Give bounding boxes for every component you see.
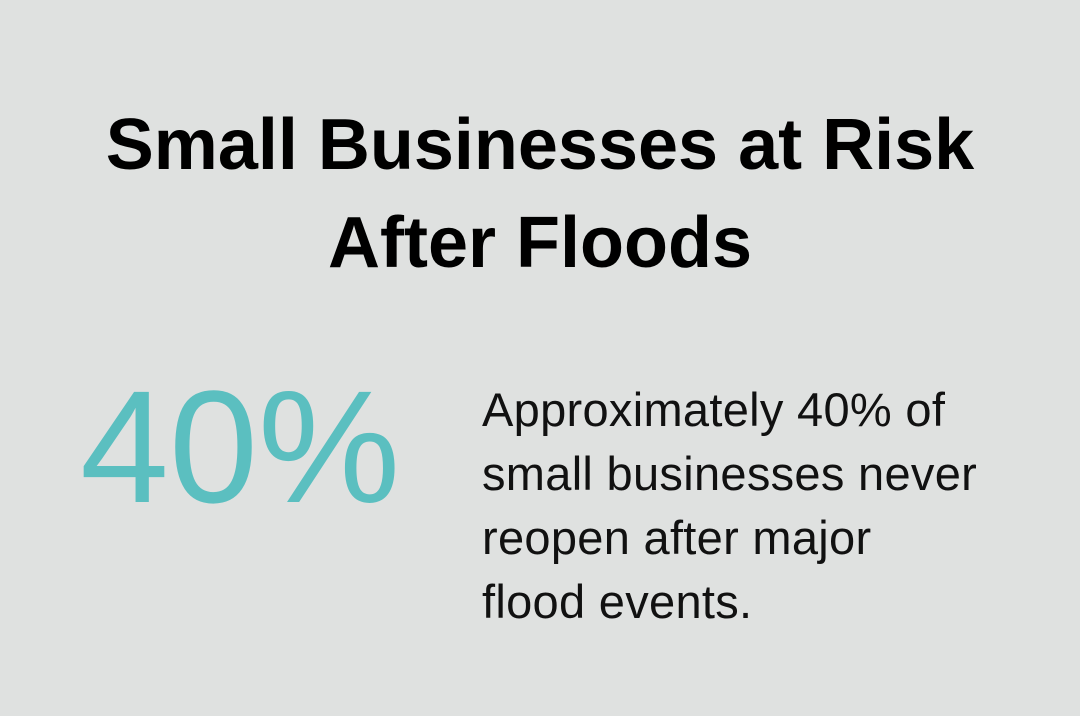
title: [106, 105, 974, 283]
description text: reopen after major: [482, 511, 871, 564]
title: Small Businesses at Risk: [106, 105, 974, 185]
description text: flood events.: [482, 575, 752, 628]
title: After Floods: [328, 203, 752, 283]
description text: small businesses never: [482, 447, 977, 500]
description text: Approximately 40% of: [482, 383, 945, 436]
description text: [482, 383, 977, 628]
big stat: 40%: 40%: [80, 357, 400, 536]
